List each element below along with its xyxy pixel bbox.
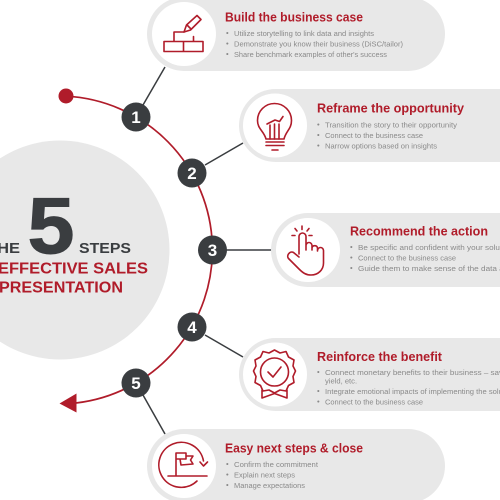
heading: easy next steps: Easy next steps & close [225,442,363,456]
text block: recommend [350,242,500,273]
text block: reframe [317,120,457,150]
step number badges: 2 [187,164,197,183]
text block: reframe: Narrow options based on insights [325,142,437,150]
panel: build the business case [147,0,445,71]
step number badges: 5 [131,374,141,393]
text block: reframe: Connect to the business case [325,131,423,140]
text block: easy next steps [226,460,319,490]
icon: flag with circular arrow [159,442,208,487]
text block: recommend: • [350,242,353,252]
text block: reframe: Transition the story to their opportunity [325,120,457,130]
panel: reinforce the benefit [239,338,500,411]
central circle title: EFFECTIVE SALES [0,260,148,278]
text block: build [226,28,403,59]
heading: reframe: Reframe the opportunity [317,102,464,116]
panel: reframe the opportunity [239,89,500,162]
text block: recommend: • [350,264,353,272]
icon: pointing hand [288,226,324,275]
text block: reinforce: • [317,368,320,376]
panel: easy next steps and close [147,429,445,500]
central circle title: PRESENTATION [0,280,123,296]
text block: build: • [226,39,229,48]
text block: reframe: • [317,120,320,129]
text block: easy next steps: • [226,460,229,468]
icon: bricks and trowel [164,16,203,52]
text block: recommend: Connect to the business case [358,254,456,262]
text block: build: • [226,50,229,58]
text block: easy next steps: Confirm the commitment [234,460,319,469]
icon: light bulb with chart [258,104,292,150]
text block: reframe: • [317,141,320,150]
central circle title: STEPS [79,241,131,257]
text block: reinforce: • [317,386,320,396]
heading: reinforce: Reinforce the benefit [317,350,443,364]
text block: reinforce [317,368,500,406]
central circle title [0,140,170,360]
text block: build: • [226,28,229,38]
step number badges [122,102,227,398]
text block: reinforce: • [317,397,320,406]
text block: build: Demonstrate you know their business (DiSC/tailor) [234,40,403,48]
icon: award ribbon [254,350,296,398]
central circle title: 5 [28,181,74,270]
text block: reframe: • [317,130,320,140]
text block: easy next steps: • [226,470,229,479]
text block: reinforce: Connect to the business case [325,398,423,406]
step number badges: 1 [131,108,141,127]
text block: recommend: Be specific and confident with your solution [358,243,500,252]
text block: reinforce: yield, etc. [325,376,357,386]
heading: recommend: Recommend the action [350,224,488,238]
text block: recommend: • [350,253,353,262]
text block: build: Utilize storytelling to link data and insights [234,29,374,38]
step number badges: 4 [187,318,197,337]
step number badges: 3 [208,241,217,260]
text block: easy next steps: Explain next steps [234,470,295,480]
text block: build: Share benchmark examples of other's success [234,50,387,59]
connector lines [143,67,272,434]
text block: easy next steps: Manage expectations [234,481,305,490]
text block: easy next steps: • [226,480,229,490]
red arc timeline [58,88,212,412]
panel: recommend the action [271,213,500,287]
heading: build: Build the business case [225,10,363,24]
